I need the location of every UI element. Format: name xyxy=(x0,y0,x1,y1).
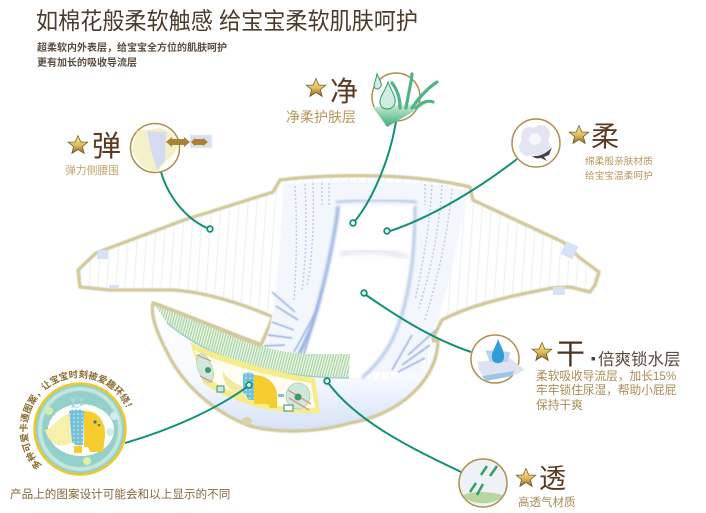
elephant xyxy=(45,396,118,465)
caption xyxy=(536,369,677,412)
caption: 牢牢锁住尿湿，帮助小屁屁 xyxy=(536,383,677,397)
caption: 净柔护肤层 xyxy=(286,109,356,125)
diaper main body fill xyxy=(78,176,599,380)
caption: 保持干爽 xyxy=(536,398,583,412)
intro text: 超柔软内外表层，给宝宝全方位的肌肤呵护 xyxy=(37,41,227,54)
icon: water drop on layers xyxy=(471,335,525,383)
elephant print xyxy=(223,372,284,408)
print panel xyxy=(194,350,315,408)
icon: breathable arrows xyxy=(459,459,507,507)
title: 如棉花般柔软触感 给宝宝柔软肌肤呵护 xyxy=(36,8,418,34)
caption: 柔软吸收导流层，加长15% xyxy=(536,369,676,383)
caption: 绵柔般亲肤材质 xyxy=(585,154,653,168)
heading: 弹 xyxy=(92,130,121,163)
star icon xyxy=(569,126,589,144)
callout: 透 xyxy=(459,459,576,509)
icon: cotton xyxy=(512,119,560,167)
star icon xyxy=(68,136,88,154)
caption: 给宝宝温柔呵护 xyxy=(585,169,653,182)
embossed side strips xyxy=(294,183,452,320)
heading separator dot xyxy=(592,357,595,360)
subheading: 倍爽锁水层 xyxy=(598,350,680,369)
waistband outline xyxy=(153,303,262,346)
leader end points xyxy=(207,220,390,388)
star icon xyxy=(516,468,536,486)
callout: cartoon pattern badge xyxy=(19,370,132,476)
badge disc xyxy=(34,384,126,474)
center column xyxy=(264,182,466,372)
callout: 弹 xyxy=(65,124,212,177)
center absorbent pad xyxy=(298,206,414,378)
heading: 干 xyxy=(556,339,585,371)
leg gathers xyxy=(264,290,436,372)
star icon xyxy=(532,342,552,360)
yellow print band xyxy=(190,342,320,413)
icon: elastic waist xyxy=(130,124,212,172)
callout: 干 xyxy=(471,335,680,412)
callout: 柔 xyxy=(512,119,653,182)
waistband teal edge xyxy=(167,323,349,378)
balloon prints xyxy=(193,352,311,410)
heading: 透 xyxy=(539,464,566,494)
pad edge shading xyxy=(295,206,338,362)
heading: 净 xyxy=(330,76,358,107)
diaper lower section xyxy=(152,303,438,431)
diaper illustration xyxy=(78,176,599,431)
disclaimer: 产品上的图案设计可能会和以上显示的不同 xyxy=(10,487,230,501)
green waistband xyxy=(154,304,350,378)
caption: 弹力侧腰围 xyxy=(65,163,119,177)
curved caption: 多种可爱卡通图案，让宝宝时刻被爱趣环绕！ xyxy=(19,370,132,470)
star icon xyxy=(306,78,326,96)
diaper main outline xyxy=(78,176,599,345)
icon: leaves and water drop xyxy=(372,73,437,127)
heading: 柔 xyxy=(591,121,619,152)
leader lines xyxy=(125,121,517,472)
caption: 高透气材质 xyxy=(518,495,576,509)
intro text: 更有加长的吸收导流层 xyxy=(37,56,137,69)
callout: 净 xyxy=(286,73,437,127)
intro text xyxy=(37,41,227,69)
caption xyxy=(585,154,653,182)
side tabs xyxy=(97,241,578,295)
badge inner ring xyxy=(40,389,120,469)
